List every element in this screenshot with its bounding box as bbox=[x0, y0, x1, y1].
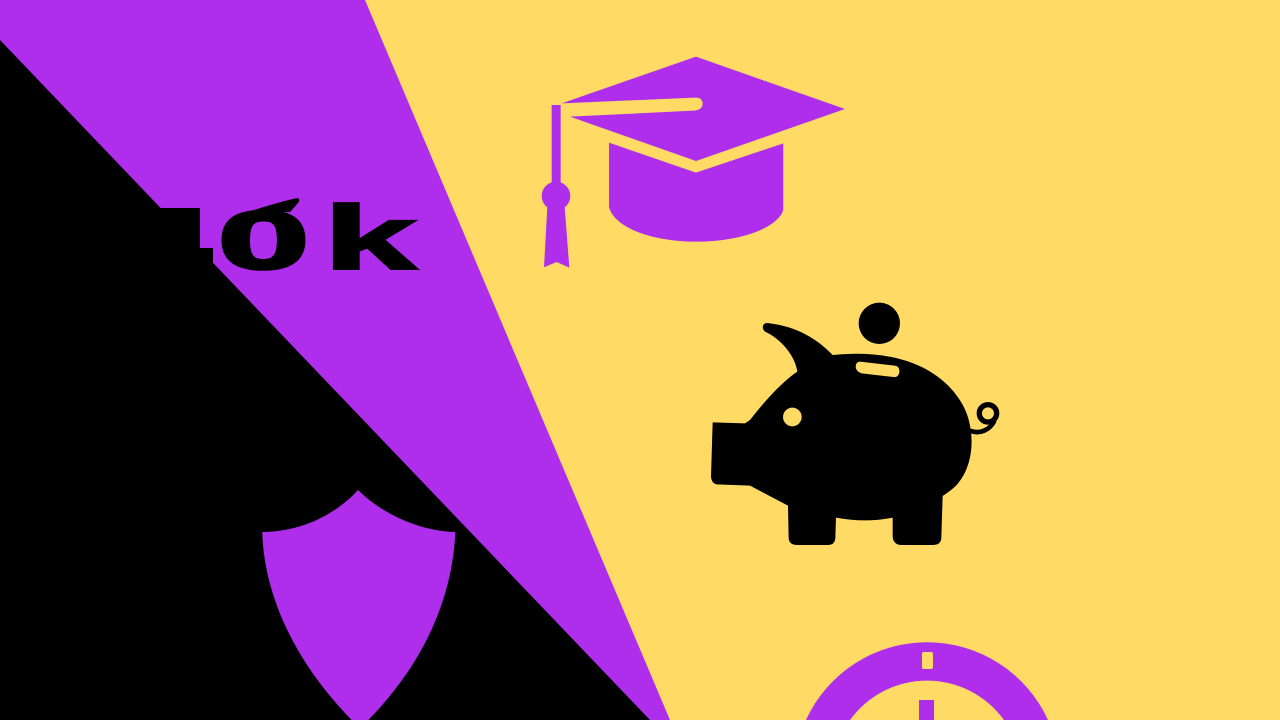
icon: graduation cap bbox=[542, 57, 845, 268]
tassel knot bbox=[542, 182, 570, 210]
clock hand bbox=[919, 700, 934, 720]
icon: shield bbox=[262, 490, 455, 720]
cap board bbox=[562, 57, 845, 161]
clock ring bbox=[806, 642, 1048, 720]
cap base bbox=[609, 143, 783, 242]
panel: black triangle bbox=[0, 40, 650, 720]
heading: 10k figure: k bbox=[323, 187, 418, 289]
clock tick bbox=[922, 652, 933, 669]
icon: clock bbox=[806, 642, 1048, 720]
panel: purple wedge bbox=[0, 0, 670, 720]
heading: 10k figure bbox=[145, 187, 418, 289]
tassel end bbox=[544, 207, 569, 268]
coin bbox=[859, 303, 900, 344]
tassel cord bbox=[552, 105, 561, 187]
heading: 10k figure: 0 bbox=[218, 195, 309, 286]
icon: piggy bank bbox=[711, 303, 997, 545]
heading: 10k figure: 1 bbox=[145, 193, 216, 288]
pig tail bbox=[971, 405, 997, 432]
pig body bbox=[711, 323, 972, 545]
